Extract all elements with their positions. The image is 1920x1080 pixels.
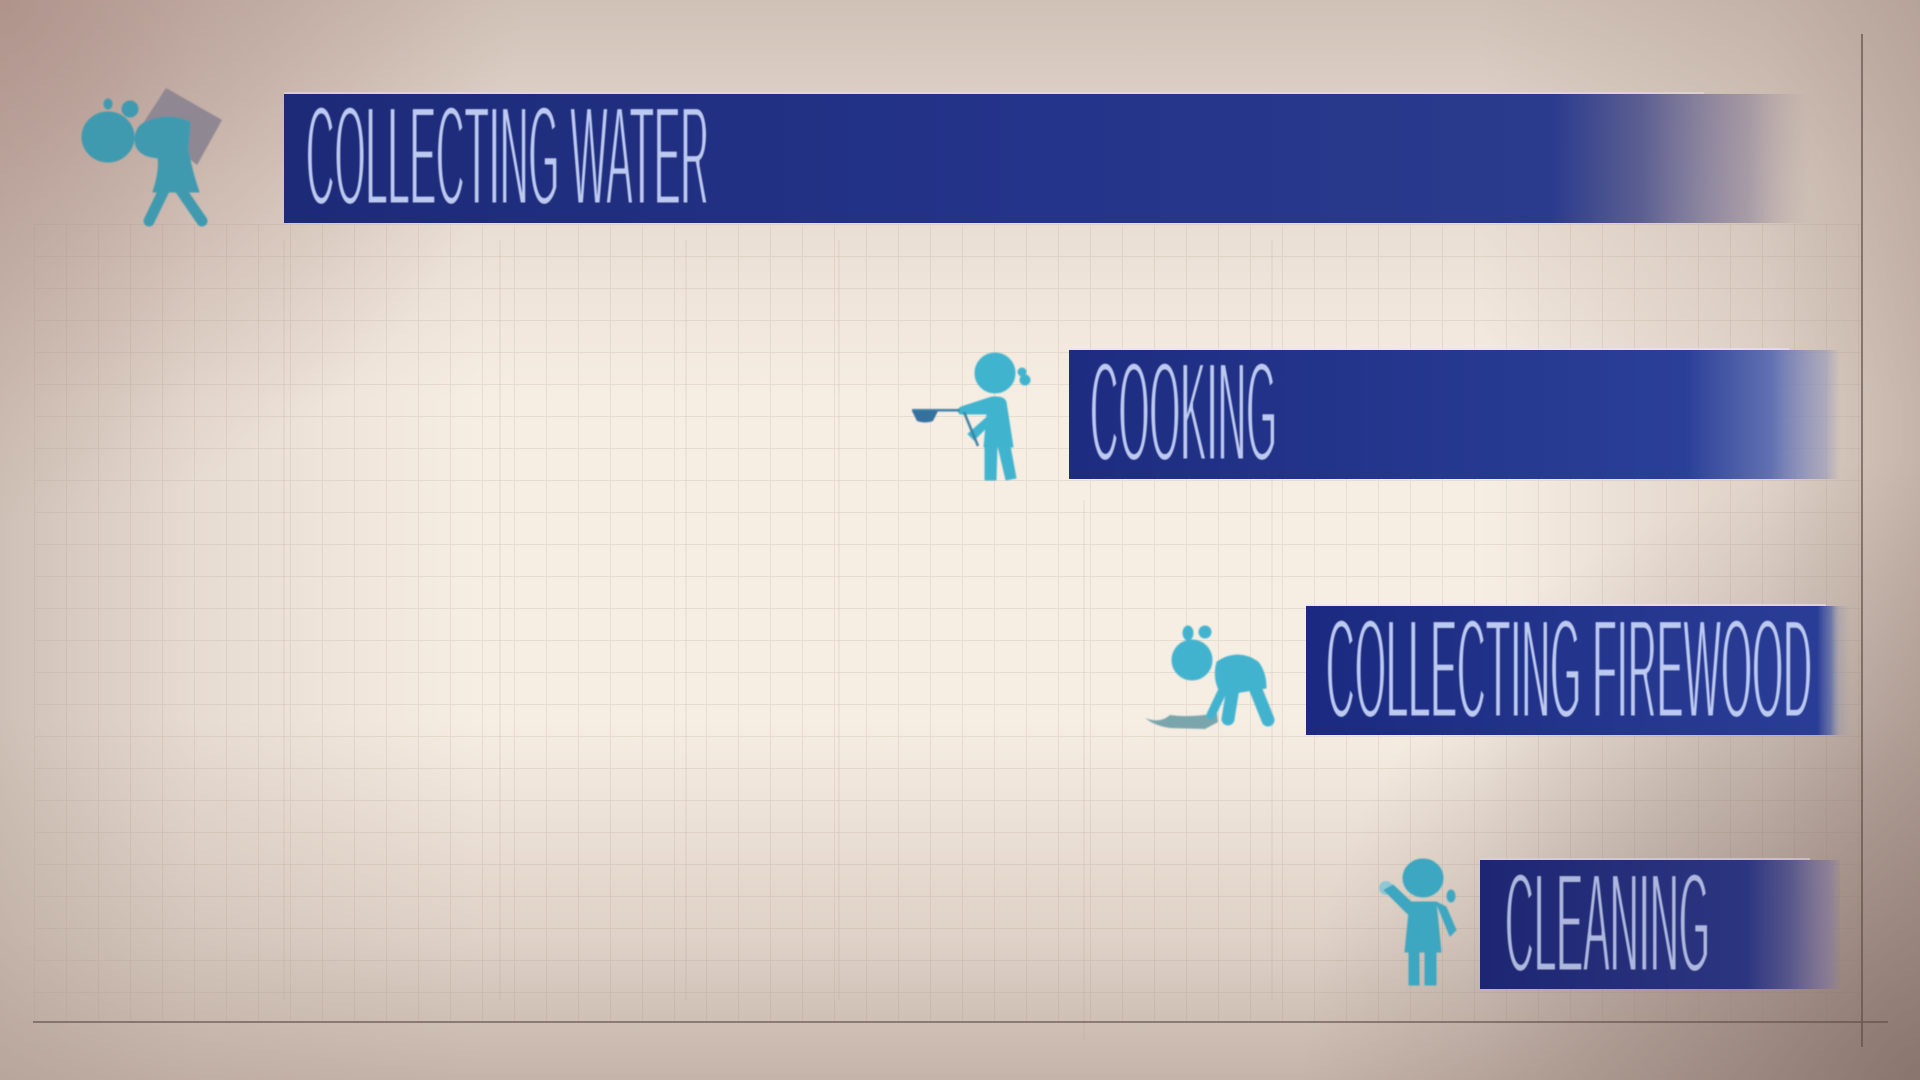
icon: girl carrying water xyxy=(82,88,222,221)
icon: girl cooking with a pan xyxy=(912,353,1030,480)
bar: collecting water: COLLECTING WATER xyxy=(306,77,709,236)
bar: cooking: COOKING xyxy=(1090,333,1277,492)
icon: girl cleaning xyxy=(1379,859,1456,985)
bar: collecting firewood xyxy=(1306,590,1850,749)
icon: girl collecting firewood xyxy=(1145,626,1268,729)
